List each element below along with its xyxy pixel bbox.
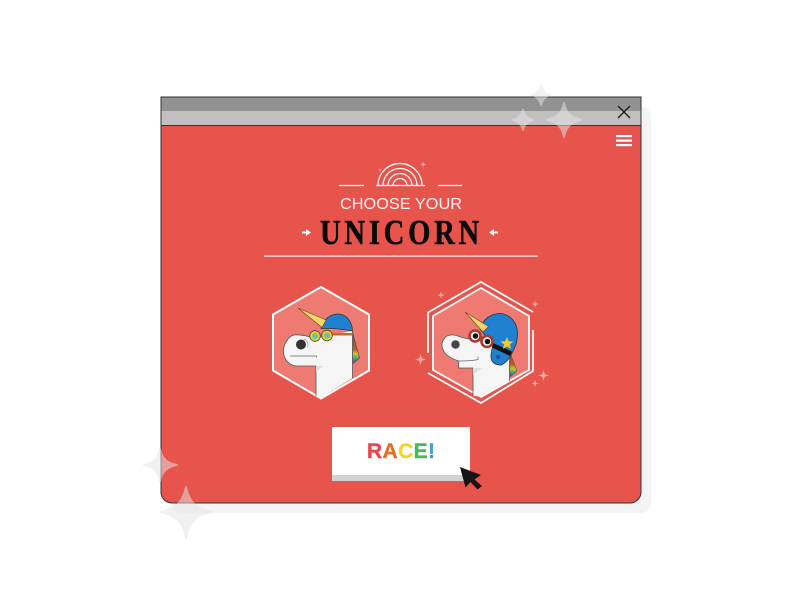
rainbow mane	[509, 350, 517, 377]
ear hole	[496, 355, 500, 359]
hexagon badge	[273, 287, 369, 398]
window body	[161, 125, 641, 503]
goggles	[310, 331, 320, 341]
outer selection frame	[428, 282, 533, 403]
head outline	[283, 331, 352, 396]
heading: unicorn: UNICORN	[320, 212, 483, 252]
rainbow mane	[352, 332, 360, 364]
helmet strap	[492, 343, 512, 356]
eye	[451, 340, 460, 349]
horn	[298, 308, 326, 328]
icon: left arrow ornament	[302, 229, 311, 236]
horn	[465, 312, 488, 332]
goggles	[470, 330, 480, 342]
app window	[161, 97, 641, 503]
option: unicorn with goggles	[273, 287, 369, 398]
mouth	[290, 356, 316, 358]
eye	[296, 340, 306, 350]
helmet	[480, 314, 518, 365]
sparkles: bottom left	[144, 449, 212, 538]
option: selected unicorn with helmet	[415, 282, 549, 403]
unicorn head	[442, 335, 510, 396]
unicorn head	[283, 331, 352, 398]
heading underline	[264, 256, 538, 257]
title bar	[161, 97, 641, 125]
sparkles: top right	[513, 85, 581, 137]
icon: right arrow ornament	[489, 229, 498, 236]
heading: choose your: CHOOSE YOUR	[340, 196, 462, 213]
button label: RACE!	[367, 440, 435, 463]
hexagon badge	[433, 288, 529, 397]
window drop shadow	[171, 107, 651, 513]
icon: close button	[618, 106, 630, 118]
goggles strap	[332, 333, 352, 336]
helmet star	[500, 337, 514, 349]
helmet	[321, 314, 352, 331]
race button	[332, 427, 470, 481]
small sparkles	[415, 292, 549, 387]
icon: rainbow emblem	[339, 162, 462, 186]
icon: mouse cursor	[460, 467, 482, 490]
head outline	[442, 335, 510, 396]
icon: hamburger menu	[616, 135, 632, 146]
